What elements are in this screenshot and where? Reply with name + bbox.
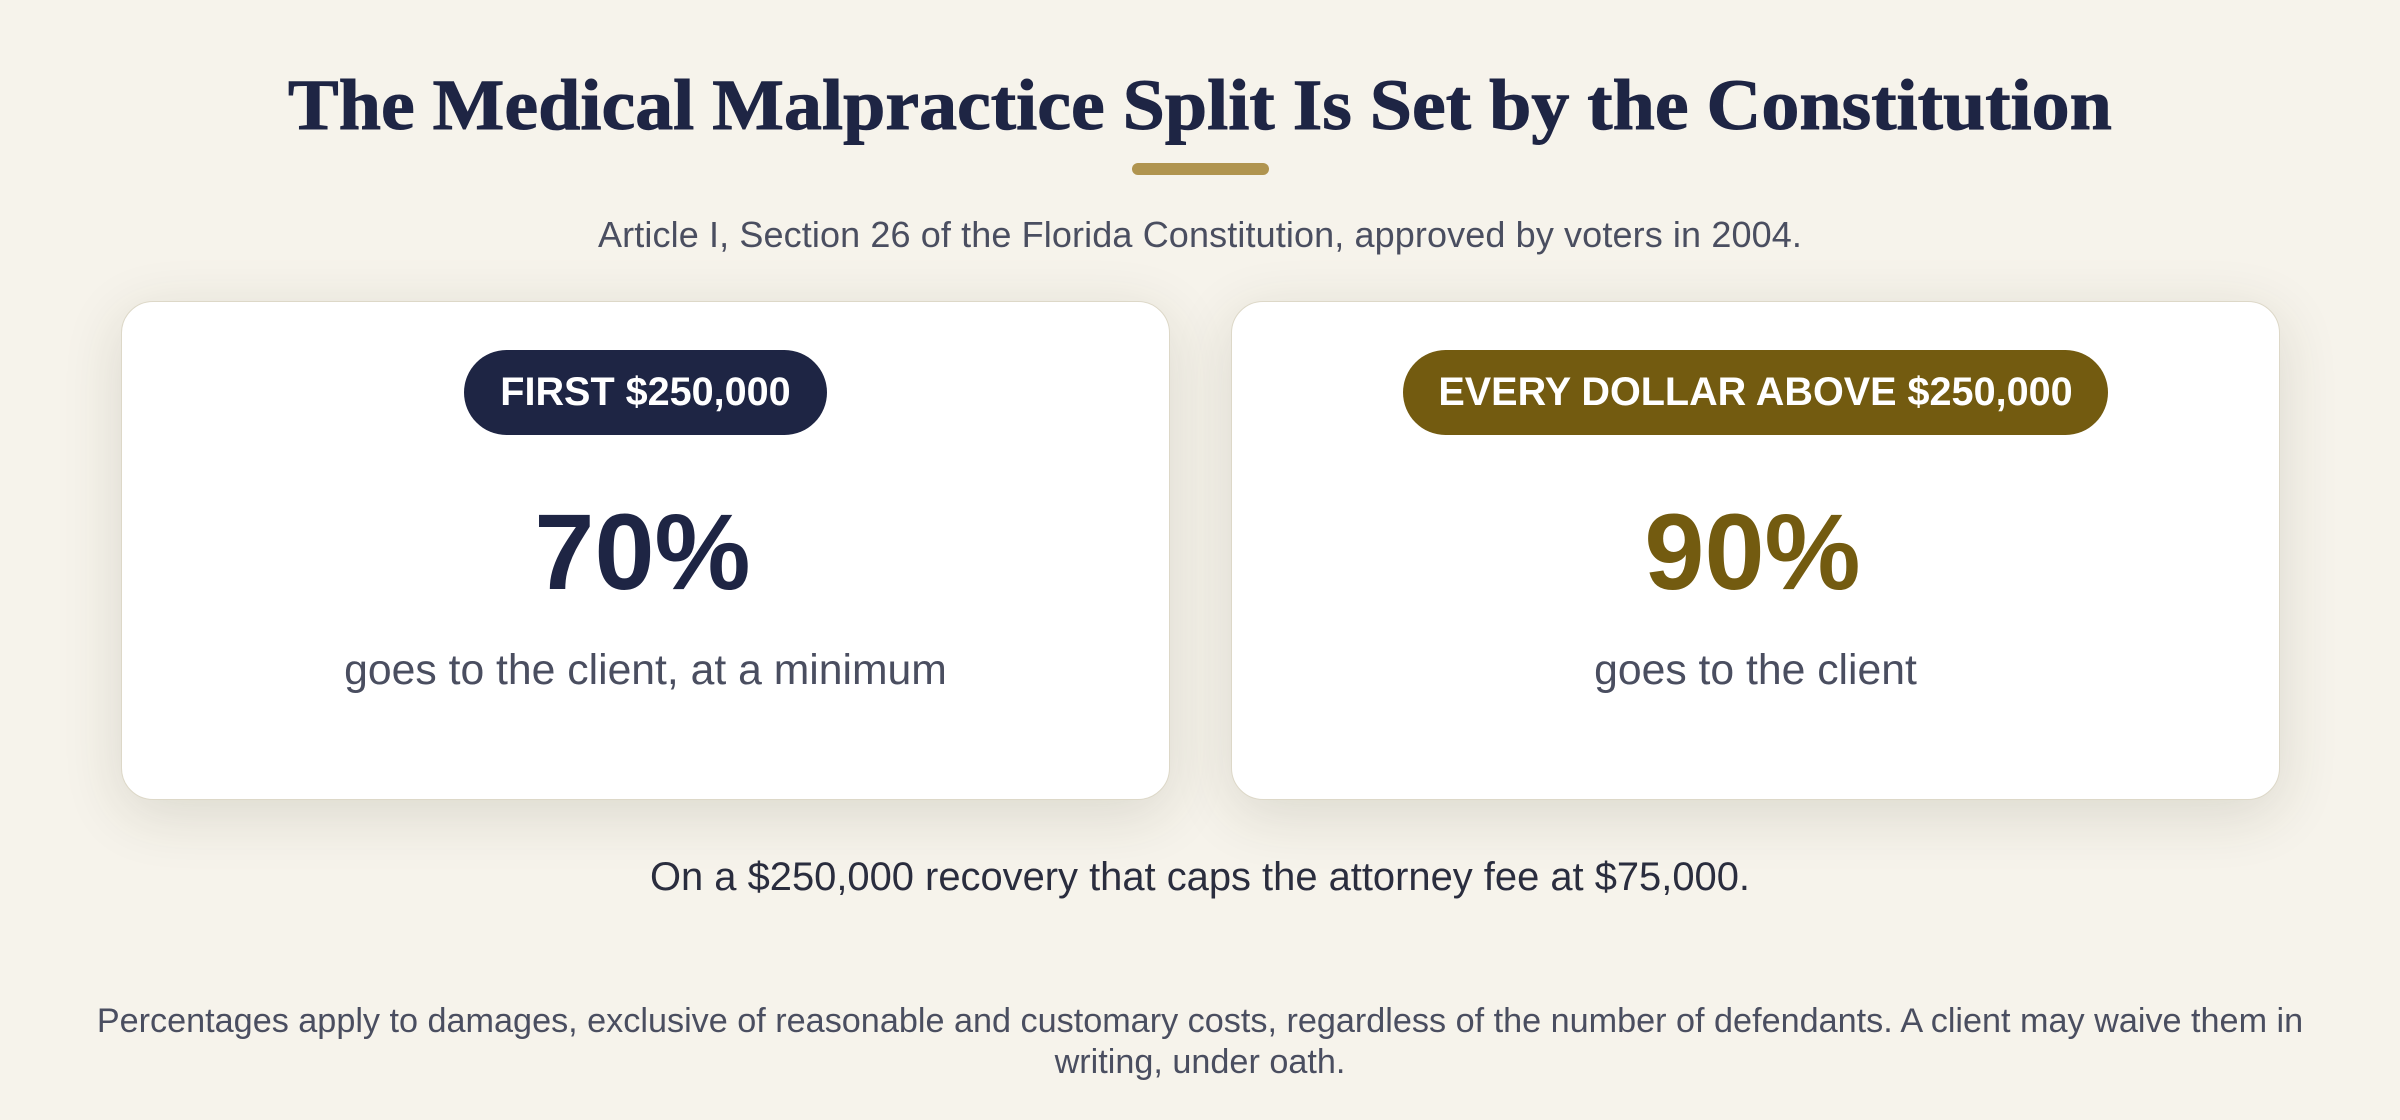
footnote: Percentages apply to damages, exclusive of reasonable and customary costs, regardless of the number of defendants. A client may waive them in: [97, 1002, 2303, 1040]
example note: On a $250,000 recovery that caps the attorney fee at $75,000.: [650, 855, 1750, 899]
panel: every dollar above: [1231, 301, 2280, 800]
pill label: EVERY DOLLAR ABOVE $250,000: [1438, 370, 2073, 414]
footnote: [97, 1002, 2303, 1081]
title: The Medical Malpractice Split Is Set by the Constitution: [288, 65, 2112, 145]
pill label: [464, 350, 827, 435]
panel: first 250,000: [121, 301, 1170, 800]
gold divider: [1132, 163, 1269, 175]
subtitle: Article I, Section 26 of the Florida Constitution, approved by voters in 2004.: [598, 214, 1802, 255]
pill label: FIRST $250,000: [500, 370, 791, 414]
footnote: writing, under oath.: [1055, 1043, 1345, 1081]
description: goes to the client, at a minimum: [344, 646, 947, 694]
description: goes to the client: [1594, 646, 1917, 694]
percentage: 70%: [534, 491, 751, 612]
pill label: [1403, 350, 2108, 435]
percentage: 90%: [1644, 491, 1861, 612]
